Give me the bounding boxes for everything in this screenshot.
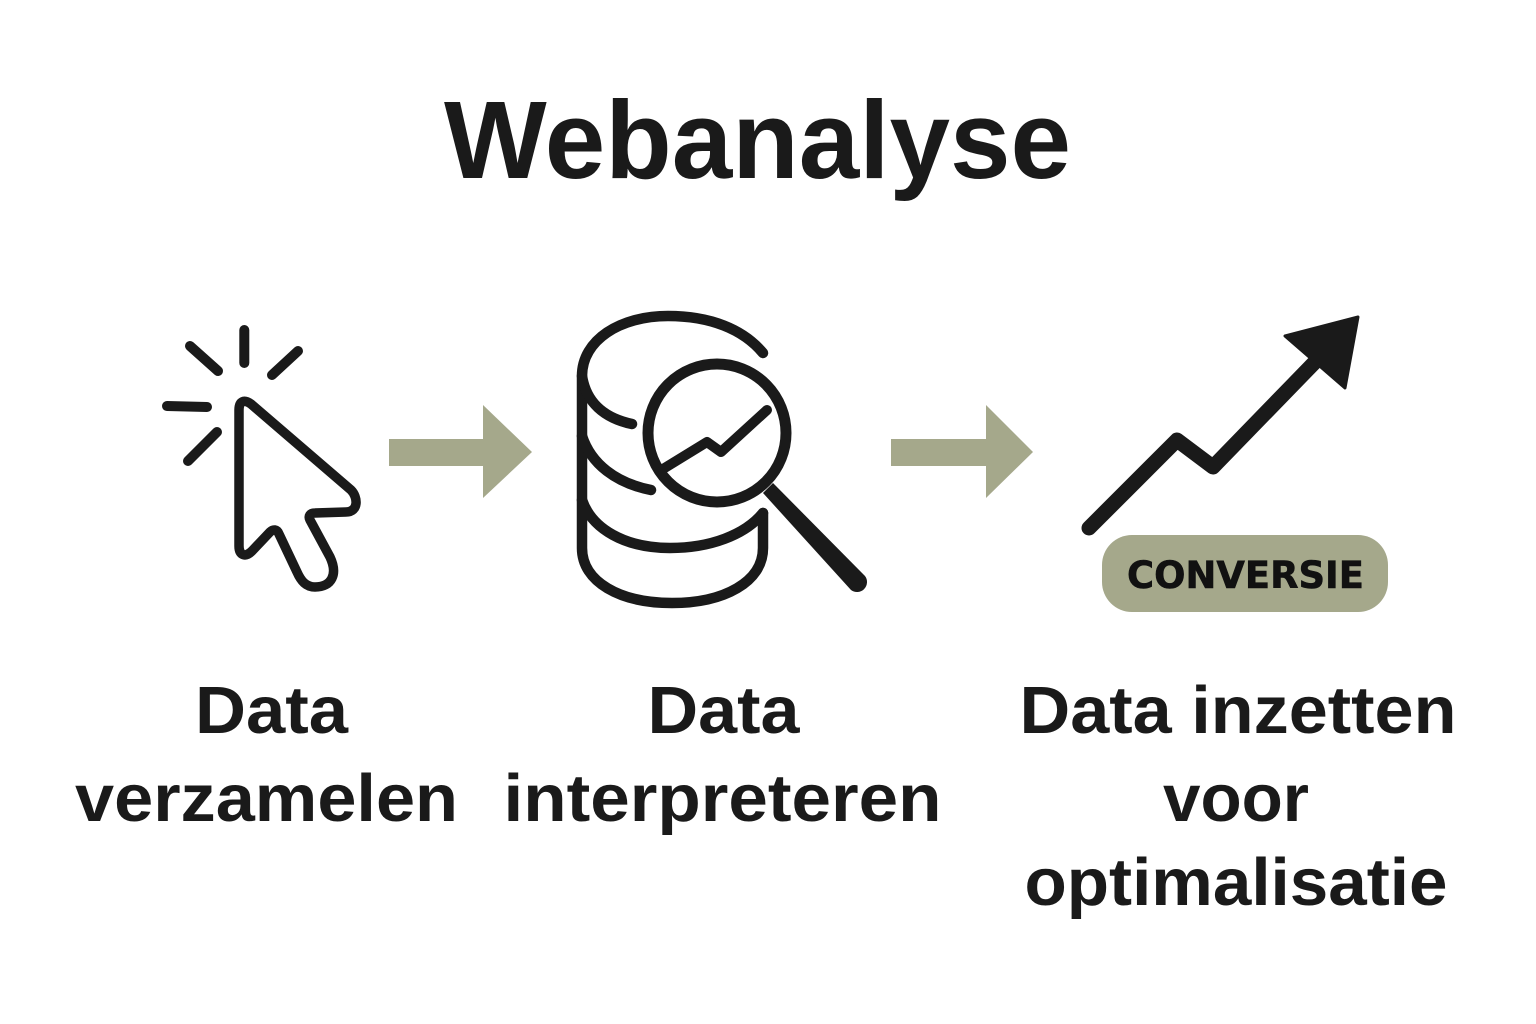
conversion badge (1102, 535, 1388, 612)
arrow: step two to step three (891, 405, 1033, 498)
label: data verzamelen: Data (195, 673, 349, 748)
label: data verzamelen (75, 673, 458, 836)
database layer lines (582, 376, 763, 548)
icon: click cursor (167, 330, 356, 587)
label: data interpreteren (504, 673, 942, 836)
label: data interpreteren: interpreteren (504, 761, 942, 836)
arrow: step one to step two (389, 405, 532, 498)
click rays (167, 330, 298, 461)
conversion badge: CONVERSIE (1127, 554, 1364, 597)
title: Webanalyse (444, 79, 1071, 202)
label: data inzetten voor optimalisatie (1020, 673, 1456, 920)
label: data inzetten voor optimalisatie: Data inzetten (1020, 673, 1456, 748)
magnifying glass handle (763, 483, 867, 592)
magnifying glass lens (648, 364, 786, 502)
label: data inzetten voor optimalisatie: optimalisatie (1024, 845, 1448, 920)
icon: database with magnifying glass (582, 316, 867, 603)
label: data inzetten voor optimalisatie: voor (1163, 761, 1309, 836)
database cylinder (582, 316, 763, 603)
label: data interpreteren: Data (648, 673, 800, 748)
trend line in lens (663, 410, 767, 469)
label: data verzamelen: verzamelen (75, 761, 458, 836)
icon: rising trend arrow (1089, 317, 1358, 528)
cursor outline (239, 401, 356, 587)
